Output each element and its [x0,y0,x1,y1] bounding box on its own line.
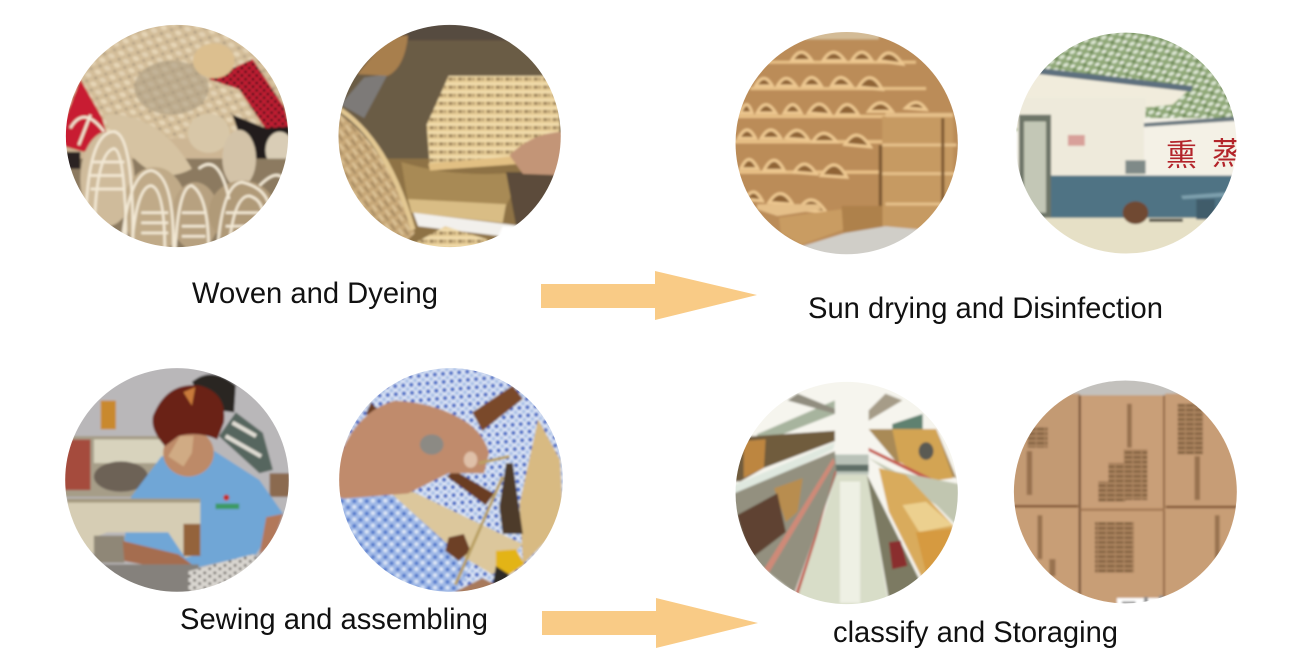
label: Woven and Dyeing: Woven and Dyeing [192,277,438,310]
label: Sewing and assembling: Sewing and assembling [180,603,488,636]
photo: basket dipped in dye [334,24,570,257]
photo: hand fitting chain on bag [337,365,567,602]
sign: 熏蒸 characters: 蒸 [1212,137,1243,172]
panel: woven and dyeing [60,20,570,310]
arrow: bottom [542,598,758,648]
label: classify and Storaging: classify and Storaging [833,616,1118,649]
photo: worker at sewing machine [65,368,289,592]
sign: 熏蒸 characters [1168,138,1236,168]
panel: sewing and assembling [60,365,567,636]
label: Sun drying and Disinfection: Sun drying and Disinfection [808,292,1163,325]
arrow: top [541,271,757,320]
photo: stacked cardboard boxes [1011,378,1240,617]
panel: sun drying and disinfection [730,27,1243,325]
sign: 熏蒸 characters: 熏 [1166,138,1197,173]
panel: classify and storaging [730,378,1240,649]
photo: woven baskets and workers [66,24,288,248]
photo: stacked baskets drying [736,32,958,254]
photo: warehouse aisle [736,382,958,604]
photo: fumigation building [1011,30,1243,262]
